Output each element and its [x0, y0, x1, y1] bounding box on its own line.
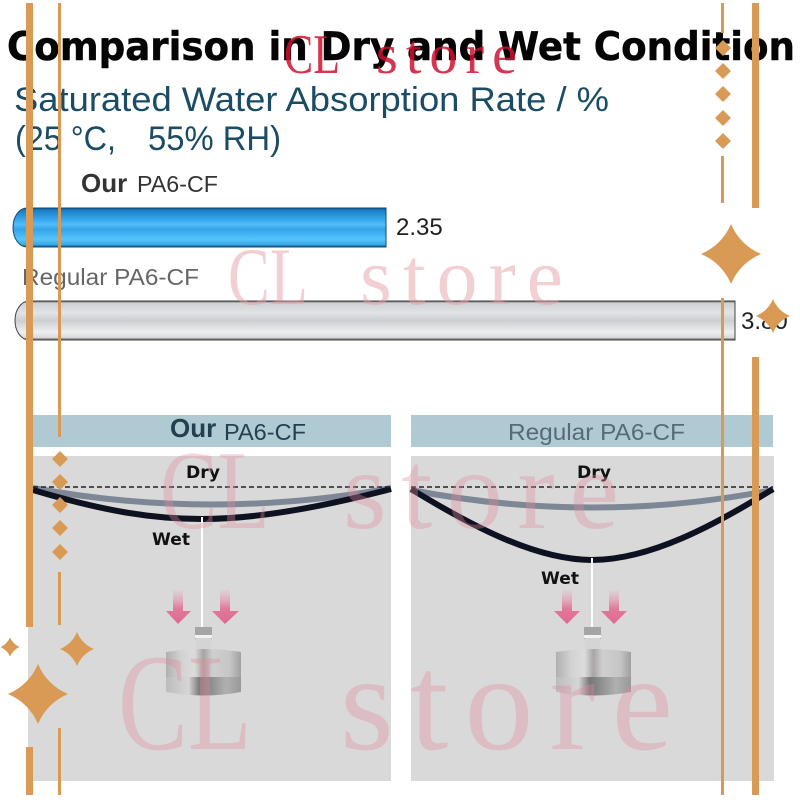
bar: regular PA6-CF — [15, 301, 735, 340]
bar: our PA6-CF — [13, 208, 386, 247]
watermark: lower: store — [343, 429, 619, 553]
wet curve — [33, 489, 391, 519]
icon: arrow down — [601, 590, 627, 624]
panel body — [28, 456, 391, 781]
watermark: middle — [228, 231, 563, 322]
subtitle: absorption rate: (25 °C, — [15, 120, 116, 158]
watermark: top — [284, 24, 517, 86]
label: dry: Dry — [577, 463, 611, 483]
icon: arrow down — [554, 590, 580, 624]
icon: weight — [166, 627, 241, 696]
panel header: PA6-CF — [224, 419, 306, 445]
panel body — [411, 456, 774, 781]
value: 3.80: 3.80 — [741, 308, 788, 335]
watermark: middle: CL — [228, 231, 308, 322]
label: regular PA6-CF: Regular PA6-CF — [22, 264, 199, 290]
watermark: bottom — [118, 626, 673, 779]
dashed dry line — [411, 486, 773, 488]
subtitle: absorption rate — [14, 81, 609, 158]
icon: arrow down — [166, 590, 191, 624]
dry curve — [411, 490, 773, 508]
dashed dry line — [33, 486, 391, 488]
panel header — [411, 415, 773, 447]
icon: sparkle large left — [8, 664, 68, 724]
decoration: right orange lines — [721, 3, 759, 795]
label: our PA6-CF: PA6-CF — [137, 171, 218, 197]
icon: weight — [556, 627, 631, 696]
panel header — [33, 413, 391, 447]
decoration: left diamonds — [52, 451, 68, 560]
subtitle: absorption rate: 55% RH) — [148, 120, 281, 158]
watermark: bottom: store — [340, 626, 673, 779]
watermark: top: store — [376, 24, 517, 86]
panel header: Our — [170, 413, 216, 443]
label: wet: Wet — [541, 569, 579, 589]
string — [591, 558, 593, 640]
icon: arrow down — [212, 590, 239, 624]
icon: sparkle medium left — [60, 632, 94, 666]
label: our PA6-CF: Our — [81, 168, 127, 198]
watermark: middle: store — [360, 231, 563, 322]
decoration: left orange lines — [26, 3, 61, 795]
watermark: lower: CL — [160, 429, 270, 553]
label: our PA6-CF — [81, 168, 218, 198]
watermark: lower — [160, 429, 619, 553]
panel: our PA6-CF — [28, 413, 391, 781]
wet curve — [411, 489, 773, 560]
label: wet: Wet — [152, 530, 190, 550]
icon: sparkle large right — [701, 224, 761, 284]
panel header: Regular PA6-CF — [508, 419, 685, 445]
icon: sparkle tiny left — [0, 638, 20, 656]
value: 2.35: 2.35 — [396, 214, 443, 241]
label: dry: Dry — [186, 463, 220, 483]
icon: sparkle small right — [756, 299, 790, 333]
string — [201, 517, 203, 640]
watermark: bottom: CL — [118, 626, 252, 779]
decoration: right diamonds — [715, 40, 731, 149]
dry curve — [33, 488, 391, 504]
bar chart: water absorption — [13, 168, 788, 340]
watermark: top: CL — [284, 24, 340, 86]
subtitle: absorption rate: Saturated Water Absorption Rate / % — [14, 81, 609, 119]
panel: regular PA6-CF — [411, 415, 774, 781]
